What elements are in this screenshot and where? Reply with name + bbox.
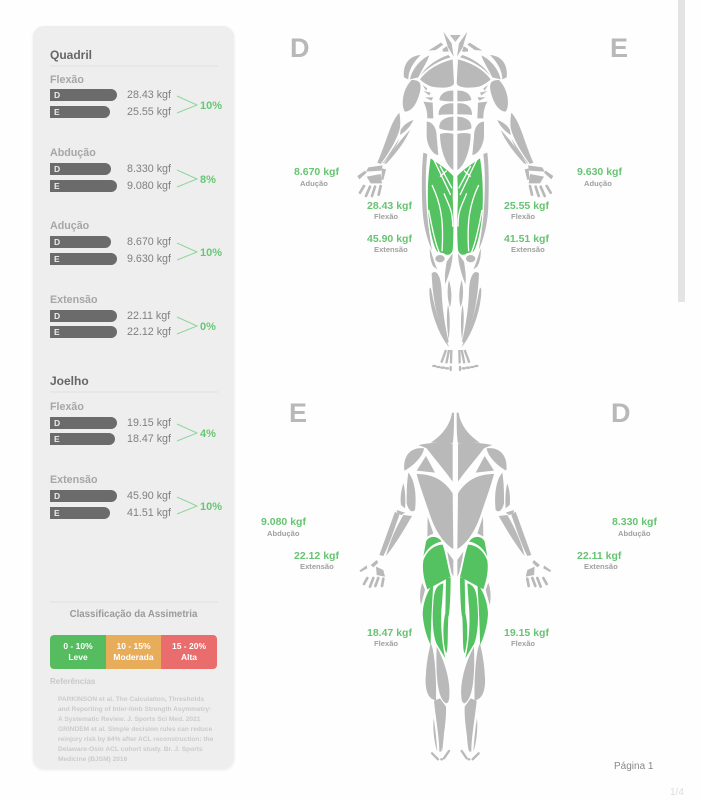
legend: asymmetry classification xyxy=(50,635,217,669)
back body half xyxy=(359,413,454,759)
legend item: alta: 15 - 20% xyxy=(172,641,206,651)
label: front left extension: Extensão xyxy=(511,245,545,254)
label: back right abduction xyxy=(612,516,657,538)
label: back right extension: 22.11 kgf xyxy=(577,550,621,562)
side letter D back: D xyxy=(611,398,630,428)
legend item: leve xyxy=(50,635,106,669)
side letter E back: E xyxy=(289,398,307,428)
label: front right flexion: 28.43 kgf xyxy=(367,200,412,212)
section: Quadril heading: Quadril xyxy=(50,48,92,62)
legend item: leve: Leve xyxy=(68,652,88,662)
heading: classification: Classificação da Assimetria xyxy=(70,609,197,620)
label: back left extension: Extensão xyxy=(300,562,334,571)
label: front left extension xyxy=(504,233,549,254)
label: back right flexion xyxy=(504,627,549,648)
metric: Quadril Flexão: D xyxy=(54,90,60,100)
metric: Quadril Abdução: 9.080 kgf xyxy=(127,180,171,192)
text: references xyxy=(58,696,214,763)
metric: Quadril Abdução: 8% xyxy=(200,174,216,186)
text: references: GRINDEM et al. Simple decision rules can reduce xyxy=(58,726,212,733)
back body mirrored half xyxy=(457,413,551,759)
metric: Joelho Flexão: 4% xyxy=(200,428,216,440)
metric: Quadril Abdução: E xyxy=(54,181,60,191)
metric: Quadril Adução: E xyxy=(54,254,60,264)
metric: Quadril Extensão: D xyxy=(54,311,60,321)
text: references: PARKINSON et al. The Calculation, Thresholds xyxy=(58,696,204,703)
metric: Joelho Flexão: D xyxy=(54,418,60,428)
legend item: leve: 0 - 10% xyxy=(63,641,93,651)
metric: Quadril Flexão: 25.55 kgf xyxy=(127,106,171,118)
label: front right adduction: 8.670 kgf xyxy=(294,166,339,178)
metric: Joelho Extensão: Extensão xyxy=(50,474,98,486)
pager: 1/4 xyxy=(670,787,684,798)
label: back left abduction: 9.080 kgf xyxy=(261,516,306,528)
metric: Quadril Abdução xyxy=(50,147,216,192)
label: front right extension: 45.90 kgf xyxy=(367,233,412,245)
legend item: moderada: Moderada xyxy=(113,652,154,662)
label: front right adduction xyxy=(294,166,339,188)
label: back left flexion xyxy=(367,627,412,648)
text: references: Delaware-Oslo ACL cohort study. Br. J. Sports xyxy=(58,746,203,753)
label: front left extension: 41.51 kgf xyxy=(504,233,549,245)
label: front right extension: Extensão xyxy=(374,245,408,254)
text: references: and Reporting of Inter-limb Strength Asymmetry: xyxy=(58,706,211,713)
metric: Joelho Extensão xyxy=(50,474,222,519)
metric: Quadril Flexão: 28.43 kgf xyxy=(127,89,171,101)
figure: back xyxy=(359,413,551,759)
text: references: A Systematic Review. J. Sports Sci Med. 2021 xyxy=(58,716,200,723)
text: references: reinjury risk by 84% after ACL reconstruction: the xyxy=(58,736,213,743)
metric: Quadril Adução: 9.630 kgf xyxy=(127,253,171,265)
metric: Joelho Flexão: 18.47 kgf xyxy=(127,433,171,445)
metric: Joelho Flexão: E xyxy=(54,434,60,444)
label: back left flexion: Flexão xyxy=(374,639,398,648)
metric: Quadril Extensão xyxy=(50,294,216,338)
metric: Joelho Flexão: Flexão xyxy=(50,401,84,413)
label: front left flexion xyxy=(504,200,549,221)
metric: Quadril Flexão: 10% xyxy=(200,100,222,112)
label: front right adduction: Adução xyxy=(300,179,328,188)
label: back right abduction: Abdução xyxy=(618,529,650,538)
metric: Quadril Adução: 10% xyxy=(200,247,222,259)
label: back right flexion: 19.15 kgf xyxy=(504,627,549,639)
label: back left extension xyxy=(294,550,339,571)
label: back left abduction xyxy=(261,516,306,538)
label: back left extension: 22.12 kgf xyxy=(294,550,339,562)
label: front left flexion: Flexão xyxy=(511,212,535,221)
label: front left adduction xyxy=(577,166,622,188)
metric: Quadril Extensão: 0% xyxy=(200,321,216,333)
metric: Quadril Abdução: D xyxy=(54,164,60,174)
metric: Quadril Flexão: Flexão xyxy=(50,74,84,86)
front body half xyxy=(357,32,455,370)
heading: references: Referências xyxy=(50,677,95,686)
front body mirrored half xyxy=(455,32,553,370)
metric: Quadril Adução: 8.670 kgf xyxy=(127,236,171,248)
metric: Quadril Extensão: 22.12 kgf xyxy=(127,326,171,338)
metric: Quadril Extensão: Extensão xyxy=(50,294,98,306)
page number: Página 1 xyxy=(614,761,653,772)
label: back right abduction: 8.330 kgf xyxy=(612,516,657,528)
label: back left flexion: 18.47 kgf xyxy=(367,627,412,639)
metric: Joelho Extensão: E xyxy=(54,508,60,518)
label: front right flexion: Flexão xyxy=(374,212,398,221)
metric: Quadril Flexão xyxy=(50,74,222,118)
scrollbar xyxy=(678,0,685,302)
label: front left adduction: 9.630 kgf xyxy=(577,166,622,178)
metric: Joelho Flexão xyxy=(50,401,216,445)
label: front left flexion: 25.55 kgf xyxy=(504,200,549,212)
label: front left adduction: Adução xyxy=(584,179,612,188)
metric: Quadril Extensão: E xyxy=(54,327,60,337)
metric: Quadril Adução xyxy=(50,220,222,265)
section: Joelho heading: Joelho xyxy=(50,374,89,388)
panel: sidebar xyxy=(33,26,234,769)
label: back left abduction: Abdução xyxy=(267,529,300,538)
legend item: moderada xyxy=(106,635,161,669)
metric: Joelho Extensão: D xyxy=(54,491,60,501)
label: front right flexion xyxy=(367,200,412,221)
label: back right flexion: Flexão xyxy=(511,639,535,648)
metric: Quadril Abdução: Abdução xyxy=(50,147,96,159)
metric: Quadril Adução: Adução xyxy=(50,220,89,232)
legend item: alta: Alta xyxy=(181,652,197,662)
metric: Quadril Adução: D xyxy=(54,237,60,247)
metric: Joelho Flexão: 19.15 kgf xyxy=(127,417,171,429)
figure: front xyxy=(357,32,553,370)
label: front right extension xyxy=(367,233,412,254)
metric: Quadril Extensão: 22.11 kgf xyxy=(127,310,170,322)
metric: Quadril Abdução: 8.330 kgf xyxy=(127,163,171,175)
side letter D front: D xyxy=(290,33,310,63)
text: references: Medicine (BJSM) 2016 xyxy=(58,756,127,763)
metric: Joelho Extensão: 45.90 kgf xyxy=(127,490,171,502)
side letter E front: E xyxy=(610,33,628,63)
label: back right extension xyxy=(577,550,622,571)
label: back right extension: Extensão xyxy=(584,562,618,571)
legend item: moderada: 10 - 15% xyxy=(116,641,151,651)
metric: Quadril Flexão: E xyxy=(54,107,60,117)
metric: Joelho Extensão: 10% xyxy=(200,501,222,513)
metric: Joelho Extensão: 41.51 kgf xyxy=(127,507,171,519)
legend item: alta xyxy=(161,635,217,669)
